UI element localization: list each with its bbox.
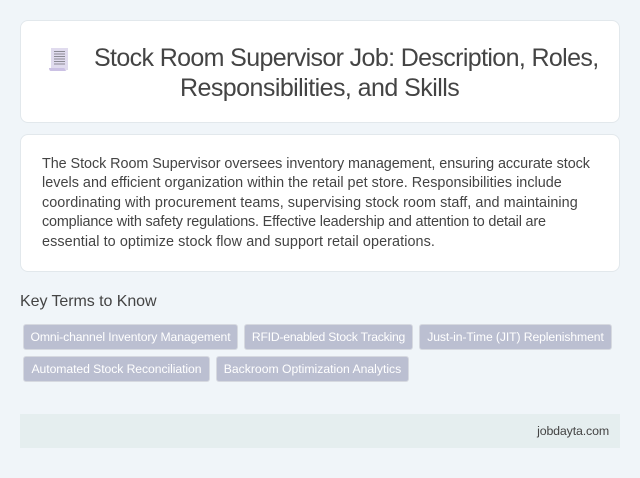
text block: description <box>42 156 590 250</box>
text block: description: levels and efficient organization within the retail pet store. Responsibilities include <box>42 175 562 191</box>
tag: RFID-enabled Stock Tracking <box>252 330 405 344</box>
tag: Just-in-Time (JIT) Replenishment <box>427 330 604 344</box>
footer bar <box>20 414 620 448</box>
title: Responsibilities, and Skills <box>180 74 459 102</box>
tag: Backroom Optimization Analytics <box>224 362 401 376</box>
icon: stock document <box>49 48 68 71</box>
panel: title card <box>20 20 620 123</box>
tag <box>23 324 238 350</box>
tag <box>419 324 612 350</box>
heading: key terms: Key Terms to Know <box>20 293 157 310</box>
tag: Omni-channel Inventory Management <box>31 330 230 344</box>
text block: description: coordinating with procurement teams, supervising stock room staff, and maintaining <box>42 195 578 211</box>
title <box>94 44 599 102</box>
tag <box>23 356 210 382</box>
text block: description: The Stock Room Supervisor oversees inventory management, ensuring accurate stock <box>42 156 590 172</box>
footer text: jobdayta.com <box>537 424 609 438</box>
tag: Automated Stock Reconciliation <box>32 362 201 376</box>
panel: key term tags <box>23 324 612 382</box>
title: Stock Room Supervisor Job: Description, Roles, <box>94 44 599 72</box>
text block: description: essential to optimize stock flow and support retail operations. <box>42 234 435 250</box>
tag <box>244 324 413 350</box>
tag <box>216 356 409 382</box>
panel: description card <box>20 134 620 272</box>
text block: description: compliance with safety regulations. Effective leadership and attention to detail are <box>42 214 546 230</box>
